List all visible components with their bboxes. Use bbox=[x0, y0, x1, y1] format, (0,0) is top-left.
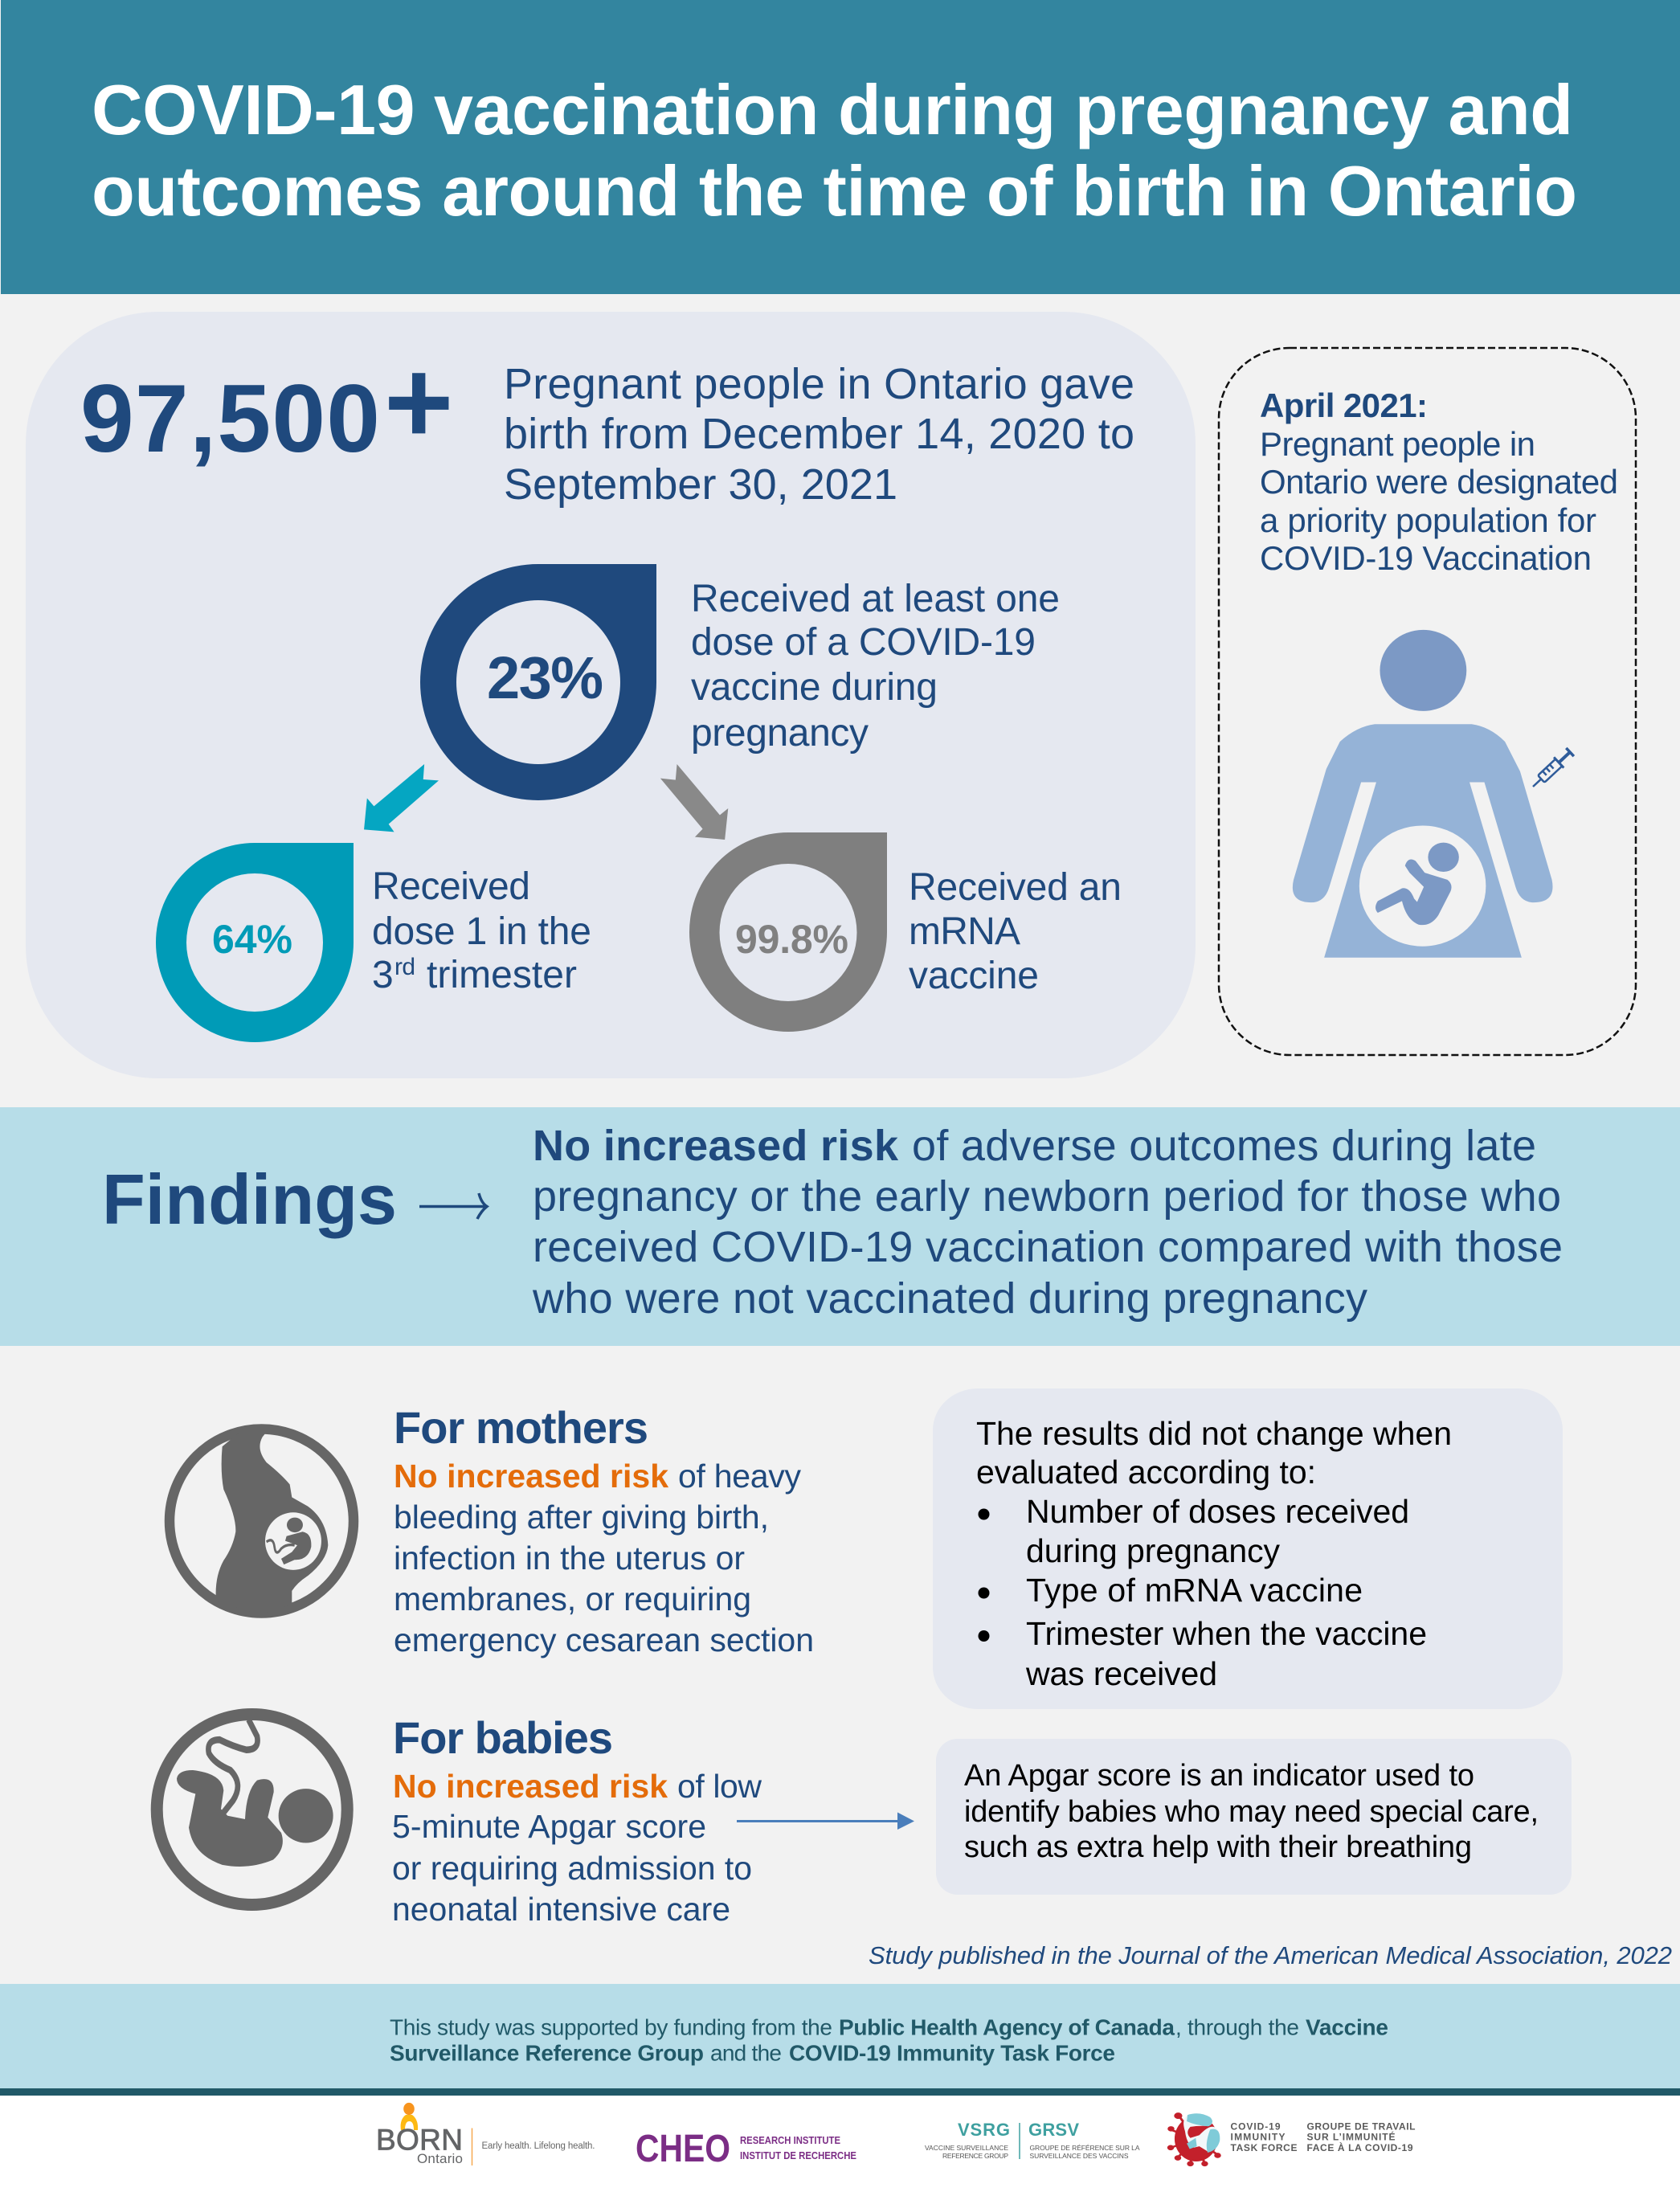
heading: Findings: Findings bbox=[102, 1159, 397, 1239]
logo: BORN Ontario bbox=[376, 2103, 595, 2166]
text: April 2021 designation: April 2021: bbox=[1260, 386, 1428, 424]
text: dose 1 in third trimester: Received bbox=[372, 865, 530, 908]
big number: 97,500+: 97,500 bbox=[80, 365, 380, 472]
logo: CHEO Research Institute: CHEO bbox=[636, 2128, 730, 2170]
text: findings statement: pregnancy or the early newborn period for those who bbox=[533, 1172, 1561, 1221]
text: findings statement: No increased risk bbox=[533, 1122, 899, 1170]
text: dose 1 in third trimester: rd bbox=[394, 954, 415, 980]
text: funding statement: Public Health Agency of Canada bbox=[839, 2015, 1175, 2039]
logo: COVID-19 Immunity Task Force: GROUPE DE TRAVAIL bbox=[1306, 2121, 1416, 2133]
icon: fetus in circle bbox=[157, 1715, 347, 1904]
text: April 2021 designation bbox=[1260, 386, 1618, 577]
big number: 97,500+: + bbox=[384, 336, 453, 468]
arrow: down left teal bbox=[364, 764, 439, 832]
header band with title bbox=[1, 0, 1680, 294]
logo: VSRG GRSV: VSRG bbox=[958, 2120, 1010, 2140]
text: funding statement: and the bbox=[710, 2041, 782, 2065]
text: received mRNA vaccine: vaccine bbox=[909, 955, 1039, 997]
text: results did not change: Number of doses received bbox=[1026, 1493, 1409, 1530]
text: funding statement: This study was supported by funding from the bbox=[390, 2015, 832, 2039]
text: funding statement bbox=[390, 2015, 1388, 2065]
text: pregnant people gave birth bbox=[504, 360, 1134, 509]
title bbox=[92, 70, 1577, 231]
text: funding statement: , through the bbox=[1175, 2015, 1299, 2039]
panel: April 2021 priority population bbox=[1219, 348, 1636, 1055]
logo: COVID-19 Immunity Task Force: COVID-19 bbox=[1231, 2121, 1281, 2133]
text block: for mothers: For mothers bbox=[394, 1402, 648, 1453]
text block: for babies: No increased risk bbox=[393, 1768, 668, 1805]
text: funding statement: COVID-19 Immunity Task Force bbox=[789, 2041, 1115, 2065]
drop chart: 99.8%: 99.8% bbox=[735, 917, 848, 962]
logo: VSRG GRSV: GRSV bbox=[1028, 2120, 1079, 2140]
logo: VSRG GRSV: GROUPE DE RÉFÉRENCE SUR LA bbox=[1030, 2144, 1140, 2152]
logo: BORN Ontario: Ontario bbox=[417, 2151, 463, 2166]
icon: pregnant silhouette in circle bbox=[170, 1429, 354, 1614]
text block: for mothers: infection in the uterus or bbox=[394, 1540, 745, 1577]
big number: 97,500+ bbox=[80, 336, 453, 472]
panel: Apgar definition bbox=[936, 1739, 1572, 1895]
text block: for mothers: membranes, or requiring bbox=[394, 1581, 751, 1617]
title: outcomes around the time of birth in Ontario bbox=[92, 151, 1577, 231]
text: at least one dose bbox=[691, 578, 1060, 755]
panel: findings band bbox=[0, 1107, 1680, 1346]
text: funding statement: Surveillance Reference Group bbox=[390, 2041, 704, 2065]
text: at least one dose: dose of a COVID-19 bbox=[691, 621, 1036, 664]
text block: for mothers: bleeding after giving birth, bbox=[394, 1499, 769, 1536]
panel: funding band bbox=[0, 1984, 1680, 2096]
text block: for mothers: emergency cesarean section bbox=[394, 1622, 814, 1658]
text: pregnant people gave birth: birth from December 14, 2020 to bbox=[504, 410, 1134, 458]
text: dose 1 in third trimester: dose 1 in the bbox=[372, 910, 591, 953]
text: Apgar score explanation: An Apgar score is an indicator used to bbox=[964, 1759, 1474, 1793]
text: results did not change: was received bbox=[1025, 1655, 1217, 1692]
text: results did not change: Type of mRNA vaccine bbox=[1026, 1572, 1363, 1609]
logo: VSRG GRSV bbox=[925, 2120, 1140, 2160]
icon: pregnant person with fetus bbox=[1293, 630, 1552, 958]
arrow: to Apgar definition bbox=[737, 1813, 914, 1830]
text block: for babies: 5-minute Apgar score bbox=[392, 1808, 706, 1845]
text block: for babies: of low bbox=[677, 1768, 762, 1805]
drop chart: 64%: 64% bbox=[212, 917, 292, 962]
text: findings statement: who were not vaccinated during pregnancy bbox=[532, 1274, 1367, 1323]
arrow: down right gray bbox=[660, 764, 728, 840]
logo: CHEO Research Institute: INSTITUT DE RECHERCHE bbox=[740, 2149, 856, 2161]
logo: COVID-19 Immunity Task Force: IMMUNITY bbox=[1231, 2131, 1286, 2142]
drop chart: 99.8% bbox=[689, 832, 887, 1032]
panel: sensitivity results bbox=[933, 1388, 1563, 1709]
text: received mRNA vaccine: mRNA bbox=[909, 910, 1020, 953]
text: received mRNA vaccine: Received an bbox=[909, 866, 1122, 909]
text: April 2021 designation: Pregnant people in bbox=[1260, 425, 1535, 463]
text: results did not change: Trimester when the vaccine bbox=[1026, 1615, 1427, 1652]
text: findings statement bbox=[532, 1122, 1563, 1323]
text: April 2021 designation: a priority population for bbox=[1260, 501, 1596, 539]
text: at least one dose: Received at least one bbox=[691, 578, 1060, 620]
text: results did not change: evaluated according to: bbox=[976, 1454, 1316, 1491]
text block: for mothers: No increased risk bbox=[394, 1458, 668, 1495]
text: Apgar score explanation: such as extra help with their breathing bbox=[964, 1830, 1472, 1864]
text: findings statement: received COVID-19 vaccination compared with those bbox=[533, 1223, 1563, 1271]
text block: for babies: For babies bbox=[393, 1712, 613, 1763]
text block: for babies: or requiring admission to bbox=[392, 1850, 752, 1887]
text: dose 1 in third trimester: 3 bbox=[372, 954, 394, 996]
text: dose 1 in third trimester: trimester bbox=[427, 954, 577, 996]
logo: COVID-19 Immunity Task Force: FACE À LA COVID-19 bbox=[1306, 2141, 1413, 2153]
logo: COVID-19 Immunity Task Force: SUR L’IMMUNITÉ bbox=[1306, 2131, 1395, 2142]
text: results did not change bbox=[976, 1415, 1452, 1692]
icon: syringe bbox=[1528, 746, 1575, 792]
logo: CHEO Research Institute bbox=[636, 2128, 856, 2170]
logo: VSRG GRSV: VACCINE SURVEILLANCE bbox=[925, 2144, 1008, 2152]
text block: for mothers: of heavy bbox=[678, 1458, 802, 1495]
drop chart: 64% bbox=[156, 843, 354, 1042]
panel: birth and vaccination statistics bbox=[26, 312, 1196, 1078]
text: findings statement: of adverse outcomes during late bbox=[912, 1122, 1536, 1170]
logo: COVID-19 Immunity Task Force bbox=[1168, 2113, 1416, 2165]
logo: VSRG GRSV: SURVEILLANCE DES VACCINS bbox=[1030, 2152, 1129, 2160]
text: received mRNA vaccine bbox=[909, 866, 1122, 997]
logo: COVID-19 Immunity Task Force: TASK FORCE bbox=[1231, 2142, 1297, 2153]
text: results did not change: The results did not change when bbox=[976, 1415, 1452, 1452]
logo: VSRG GRSV: REFERENCE GROUP bbox=[942, 2152, 1008, 2160]
text block: for babies bbox=[392, 1712, 762, 1928]
text: at least one dose: vaccine during bbox=[691, 666, 938, 709]
text: at least one dose: pregnancy bbox=[691, 712, 869, 755]
text block: for mothers bbox=[394, 1402, 814, 1658]
text block: for babies: neonatal intensive care bbox=[392, 1891, 730, 1928]
text: April 2021 designation: Ontario were designated bbox=[1260, 463, 1618, 501]
drop chart: 23% bbox=[420, 564, 656, 800]
text: Apgar score explanation bbox=[964, 1759, 1539, 1864]
logo: BORN Ontario: Early health. Lifelong health. bbox=[482, 2141, 595, 2151]
arrow: findings bbox=[419, 1193, 487, 1219]
text: funding statement: Vaccine bbox=[1306, 2015, 1388, 2039]
drop chart: 23%: 23% bbox=[487, 644, 603, 711]
text: results did not change: during pregnancy bbox=[1026, 1532, 1281, 1569]
text: pregnant people gave birth: Pregnant people in Ontario gave bbox=[504, 360, 1134, 408]
text: pregnant people gave birth: September 30, 2021 bbox=[504, 460, 897, 509]
text: Apgar score explanation: identify babies who may need special care, bbox=[964, 1795, 1539, 1829]
title: COVID-19 vaccination during pregnancy and bbox=[92, 70, 1573, 149]
logo: BORN Ontario: BORN bbox=[376, 2123, 463, 2157]
text: dose 1 in third trimester bbox=[372, 865, 591, 996]
source note: Study published in the Journal of the American Medical Association, 2022 bbox=[869, 1941, 1672, 1969]
logo: CHEO Research Institute: RESEARCH INSTITUTE bbox=[740, 2134, 840, 2146]
text: April 2021 designation: COVID-19 Vaccination bbox=[1260, 539, 1592, 577]
